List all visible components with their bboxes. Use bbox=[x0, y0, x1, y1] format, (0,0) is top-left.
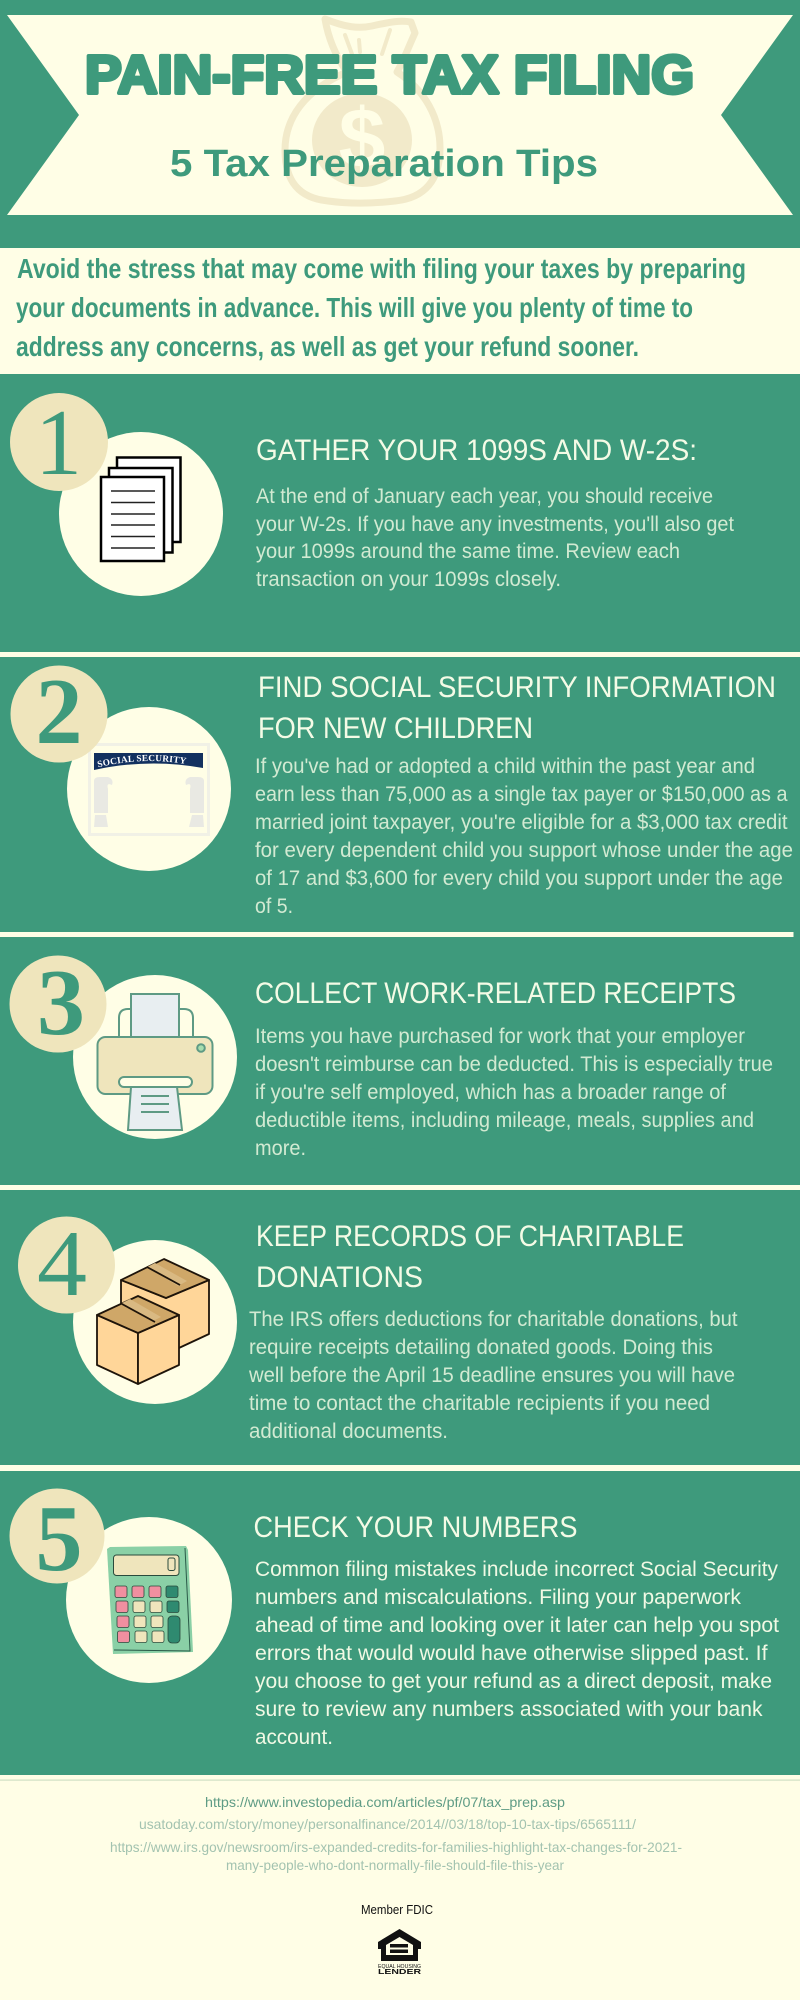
number 5: 5 bbox=[36, 1487, 82, 1591]
heading: COLLECT WORK-RELATED RECEIPTS bbox=[255, 977, 736, 1010]
icon: calculator bbox=[107, 1546, 193, 1654]
sources bbox=[110, 1794, 682, 1873]
text block: time to contact the charitable recipients if you need bbox=[249, 1392, 710, 1415]
heading: FOR NEW CHILDREN bbox=[258, 712, 533, 745]
panel: tip 5 bbox=[0, 1471, 800, 1775]
heading bbox=[258, 671, 776, 745]
text block bbox=[255, 755, 793, 918]
icon: social security card: SOCIAL SECURITY bbox=[98, 754, 186, 767]
heading: KEEP RECORDS OF CHARITABLE bbox=[256, 1220, 684, 1253]
number 4 bbox=[18, 1212, 115, 1316]
icon: equal housing lender bbox=[378, 1929, 421, 1976]
member FDIC: Member FDIC bbox=[361, 1902, 433, 1917]
text block: sure to review any numbers associated with your bank bbox=[255, 1698, 763, 1721]
subtitle: 5 Tax Preparation Tips bbox=[170, 143, 598, 185]
number 2: 2 bbox=[36, 660, 82, 764]
number 1: 1 bbox=[35, 391, 82, 495]
panel: tip 4 bbox=[0, 1190, 800, 1465]
text block: numbers and miscalculations. Filing your paperwork bbox=[255, 1586, 741, 1609]
sources: usatoday.com/story/money/personalfinance/2014//03/18/top-10-tax-tips/6565111/ bbox=[139, 1816, 636, 1832]
text block: Items you have purchased for work that your employer bbox=[255, 1025, 745, 1048]
panel: tip 1 bbox=[0, 374, 800, 652]
text block: of 5. bbox=[255, 895, 293, 918]
sources: many-people-who-dont-normally-file-should-file-this-year bbox=[226, 1857, 564, 1873]
text block: The IRS offers deductions for charitable donations, but bbox=[249, 1308, 738, 1331]
text block: At the end of January each year, you should receive bbox=[256, 485, 713, 508]
icon: equal housing lender: EQUAL HOUSING bbox=[378, 1964, 421, 1970]
text block: well before the April 15 deadline ensures you will have bbox=[248, 1364, 735, 1387]
title: PAIN-FREE TAX FILING bbox=[85, 45, 694, 105]
panel: tip 3 bbox=[0, 937, 800, 1185]
number 2 bbox=[10, 660, 108, 764]
panel: tip 2 bbox=[10, 660, 793, 918]
heading: GATHER YOUR 1099S AND W-2S: bbox=[256, 434, 697, 467]
text block: your W-2s. If you have any investments, you'll also get bbox=[256, 513, 734, 536]
heading bbox=[256, 1220, 684, 1294]
heading: DONATIONS bbox=[256, 1261, 423, 1294]
footer panel bbox=[0, 1775, 800, 2000]
text block: If you've had or adopted a child within the past year and bbox=[255, 755, 755, 778]
text block: additional documents. bbox=[249, 1420, 448, 1443]
text block bbox=[248, 1308, 738, 1443]
heading: CHECK YOUR NUMBERS bbox=[254, 1511, 578, 1544]
text block: errors that would would have otherwise slipped past. If bbox=[255, 1642, 768, 1665]
sources: https://www.irs.gov/newsroom/irs-expanded-credits-for-families-highlight-tax-changes-for-2021- bbox=[110, 1839, 682, 1855]
text block: you choose to get your refund as a direct deposit, make bbox=[255, 1670, 772, 1693]
panel: introduction bbox=[0, 248, 800, 374]
text block: married joint taxpayer, you're eligible for a $3,000 tax credit bbox=[255, 811, 788, 834]
icon: money bag: $ bbox=[339, 91, 385, 185]
text block: ahead of time and looking over it later can help you spot bbox=[255, 1614, 779, 1637]
number 3: 3 bbox=[37, 951, 85, 1055]
text block: transaction on your 1099s closely. bbox=[256, 568, 561, 591]
text block: more. bbox=[255, 1137, 306, 1160]
panel: introduction: address any concerns, as well as get your refund sooner. bbox=[16, 331, 639, 362]
text block: Common filing mistakes include incorrect Social Security bbox=[255, 1558, 778, 1581]
text block: if you're self employed, which has a broader range of bbox=[255, 1081, 726, 1104]
icon: boxes bbox=[97, 1259, 209, 1384]
text block: for every dependent child you support whose under the age bbox=[255, 839, 793, 862]
text block: of 17 and $3,600 for every child you support under the age bbox=[255, 867, 783, 890]
number 3 bbox=[10, 951, 106, 1055]
icon: printer bbox=[98, 994, 212, 1130]
number 4: 4 bbox=[37, 1212, 87, 1316]
text block: require receipts detailing donated goods. Doing this bbox=[249, 1336, 713, 1359]
text block: your 1099s around the same time. Review each bbox=[256, 540, 680, 563]
text block: deductible items, including mileage, meals, supplies and bbox=[255, 1109, 754, 1132]
text block: doesn't reimburse can be deducted. This is especially true bbox=[255, 1053, 773, 1076]
number 5 bbox=[10, 1487, 104, 1591]
sources: https://www.investopedia.com/articles/pf/07/tax_prep.asp bbox=[205, 1794, 565, 1810]
icon: social security card bbox=[88, 743, 210, 836]
text block bbox=[255, 1025, 773, 1160]
header banner bbox=[7, 15, 793, 215]
text block bbox=[255, 1558, 779, 1749]
icon: equal housing lender: LENDER bbox=[378, 1969, 421, 1976]
icon: money bag bbox=[285, 19, 440, 203]
text block bbox=[256, 485, 734, 591]
text block: account. bbox=[255, 1726, 333, 1749]
number 1 bbox=[10, 391, 108, 495]
icon: documents bbox=[101, 458, 180, 561]
